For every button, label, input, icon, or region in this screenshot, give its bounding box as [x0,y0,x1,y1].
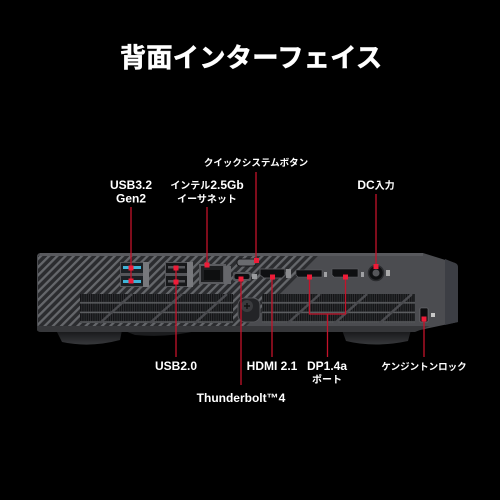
line: DP 1.4a bracket [310,277,346,357]
chassis [37,253,458,331]
device: mini PC rear view [37,253,458,345]
line: Kensington lock [423,319,425,357]
vent diagonal bars [100,294,412,323]
label: DP 1.4a port: DP1.4a [307,359,347,373]
chassis bottom edge [37,326,430,332]
right vents [262,294,415,323]
label: Intel 2.5Gb Ethernet: イーサネット [177,194,237,206]
line: Ethernet [206,207,208,265]
middle foot shadow [122,330,200,336]
line: quick system button [255,172,257,260]
line: USB 2.0 [175,268,177,357]
port: DC in [368,266,390,280]
label: USB 3.2 Gen2: USB3.2 [110,178,152,192]
label: HDMI 2.1: HDMI 2.1 [247,359,298,373]
screw [238,298,260,322]
line: HDMI [271,277,273,357]
port: quick system button [237,259,256,266]
port: HDMI [260,269,291,278]
callout lines [131,172,424,385]
port: USB 2.0 [165,262,193,287]
line: DC in [375,194,377,266]
label: Kensington lock: ケンジントンロック [381,362,467,373]
chassis right side panel [445,259,458,325]
port: Thunderbolt 4 [233,272,257,281]
line: USB 3.2 Gen2 [130,207,132,281]
label: DC in: DC入力 [357,178,395,192]
line: Thunderbolt 4 [240,279,242,385]
left foot [56,330,122,345]
left vents [80,294,233,323]
label: USB 3.2 Gen2: Gen2 [116,192,146,206]
title: 背面インターフェイス [120,43,382,73]
label: Thunderbolt 4: Thunderbolt™4 [197,391,286,405]
port: DP 2 [332,269,364,277]
striped panel [38,256,318,326]
label: DP 1.4a port: ポート [312,374,342,386]
label: quick system button: クイックシステムボタン [204,157,308,169]
right foot [342,330,411,344]
port: DP 1 [296,270,327,277]
port: USB 3.2 Gen2 [120,262,149,287]
port: Ethernet [199,264,231,284]
label: Intel 2.5Gb Ethernet: インテル2.5Gb [170,178,244,192]
label: USB 2.0: USB2.0 [155,359,197,373]
chassis top edge [40,253,423,256]
port: Kensington lock [420,308,435,322]
port marker dots [128,258,426,322]
